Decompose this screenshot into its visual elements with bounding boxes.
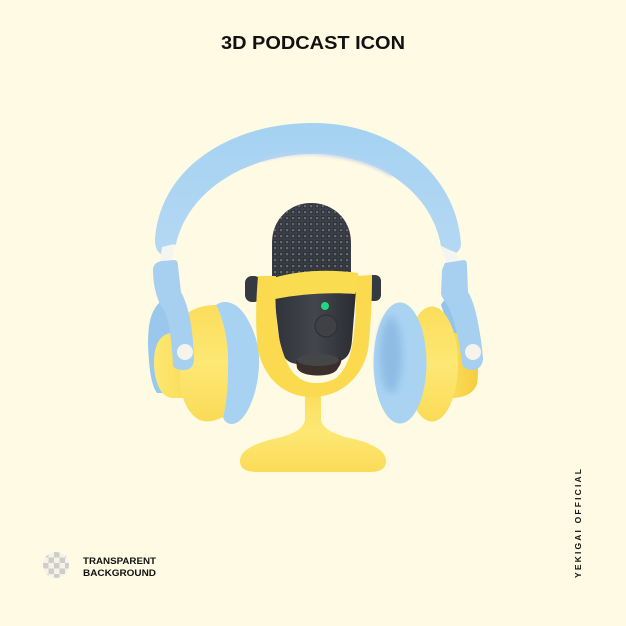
mic base and stem <box>240 392 386 472</box>
button <box>315 315 337 337</box>
icon: transparency checker <box>43 552 69 578</box>
vertical brand label: YEKIGAI OFFICIAL <box>573 469 583 578</box>
side knob left <box>245 276 261 302</box>
caption: transparent background: BACKGROUND <box>83 568 156 579</box>
right ear cup <box>374 260 483 424</box>
collar <box>273 271 358 299</box>
status light <box>321 302 329 310</box>
title: 3D PODCAST ICON <box>221 33 405 53</box>
headband <box>155 123 461 254</box>
mic head grille <box>272 203 351 278</box>
left ear cup <box>148 260 259 424</box>
icon: microphone <box>240 203 386 472</box>
left connector <box>160 244 174 262</box>
icon: headphones <box>148 123 483 424</box>
mic body <box>274 291 356 376</box>
side knob right <box>367 275 381 301</box>
caption: transparent background: TRANSPARENT <box>83 556 156 567</box>
yoke <box>256 275 372 397</box>
right connector <box>441 247 462 265</box>
